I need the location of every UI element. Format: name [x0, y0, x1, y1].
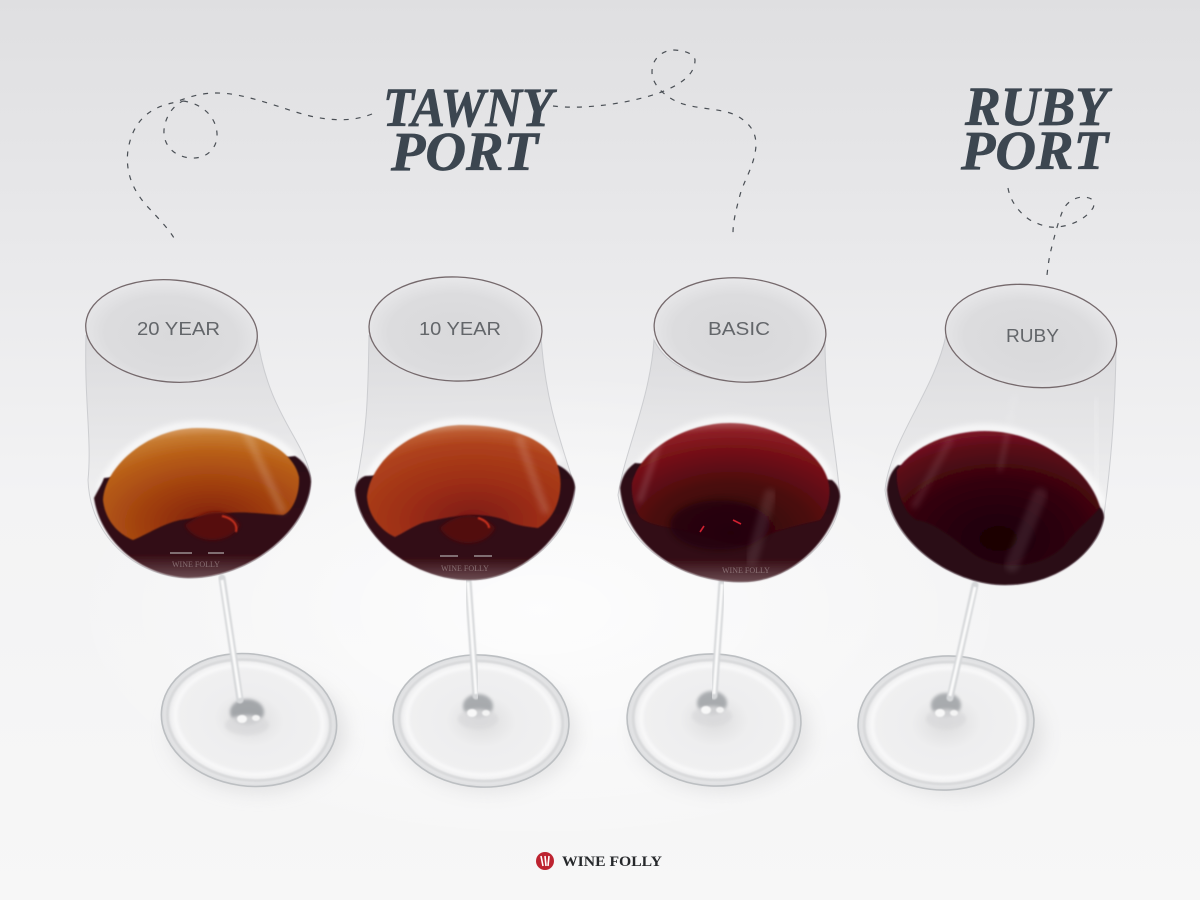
label: 20 year: 20 YEAR: [137, 319, 220, 339]
stem: [222, 578, 240, 700]
glass highlights: [452, 390, 545, 510]
foot shadow: [400, 672, 576, 792]
rim: [367, 274, 544, 384]
glass: basic tawny: [618, 272, 840, 792]
heading: Ruby Port: [960, 76, 1112, 181]
bowl: [86, 335, 311, 578]
label: ruby: RUBY: [1006, 326, 1059, 346]
heading: Tawny Port: TAWNY: [383, 77, 557, 138]
rim: [651, 272, 829, 388]
glass highlights: [1000, 395, 1098, 490]
port wine: WINE FOLLY: [441, 564, 489, 573]
glass foot: [153, 642, 345, 798]
port wine: [620, 420, 840, 582]
arrow: dashed line from Ruby Port to ruby glass: [1008, 188, 1094, 275]
glass highlights: [170, 400, 282, 510]
glass foot: [389, 649, 573, 793]
port wine: WINE FOLLY: [722, 566, 770, 575]
logo: Wine Folly: WINE FOLLY: [562, 854, 662, 870]
rim: [939, 275, 1123, 397]
port wine: [355, 422, 575, 580]
bowl: [885, 335, 1116, 585]
icon: Wine Folly mark: [536, 852, 554, 870]
bowl: [355, 335, 575, 580]
port wine: [94, 425, 311, 578]
port wine: [887, 428, 1104, 585]
heading: Ruby Port: RUBY: [964, 76, 1112, 137]
heading: Ruby Port: PORT: [960, 120, 1110, 181]
glass highlights: [640, 390, 735, 500]
foot shadow: [634, 672, 810, 792]
stem: [714, 582, 722, 696]
heading: Tawny Port: PORT: [390, 121, 540, 182]
rim: [81, 273, 262, 389]
arrow: dashed line from Tawny Port to 20 year glass: [127, 93, 372, 238]
glass foot: [855, 651, 1037, 795]
port wine: WINE FOLLY: [172, 560, 220, 569]
foot shadow: [868, 675, 1044, 795]
glass foot: [624, 650, 804, 790]
foot shadow: [170, 672, 346, 792]
glass: 20 year tawny: [81, 273, 346, 798]
bowl: [618, 340, 840, 582]
heading: Tawny Port: [383, 77, 557, 182]
glass: 10 year tawny: [355, 274, 576, 793]
stem: [468, 580, 476, 696]
arrow: dashed line from Tawny Port to basic glass: [553, 50, 756, 233]
logo: Wine Folly: [536, 852, 662, 870]
label: 10 year: 10 YEAR: [419, 319, 501, 339]
glass: ruby: [855, 275, 1123, 795]
stem: [950, 585, 975, 698]
label: basic: BASIC: [708, 319, 770, 339]
